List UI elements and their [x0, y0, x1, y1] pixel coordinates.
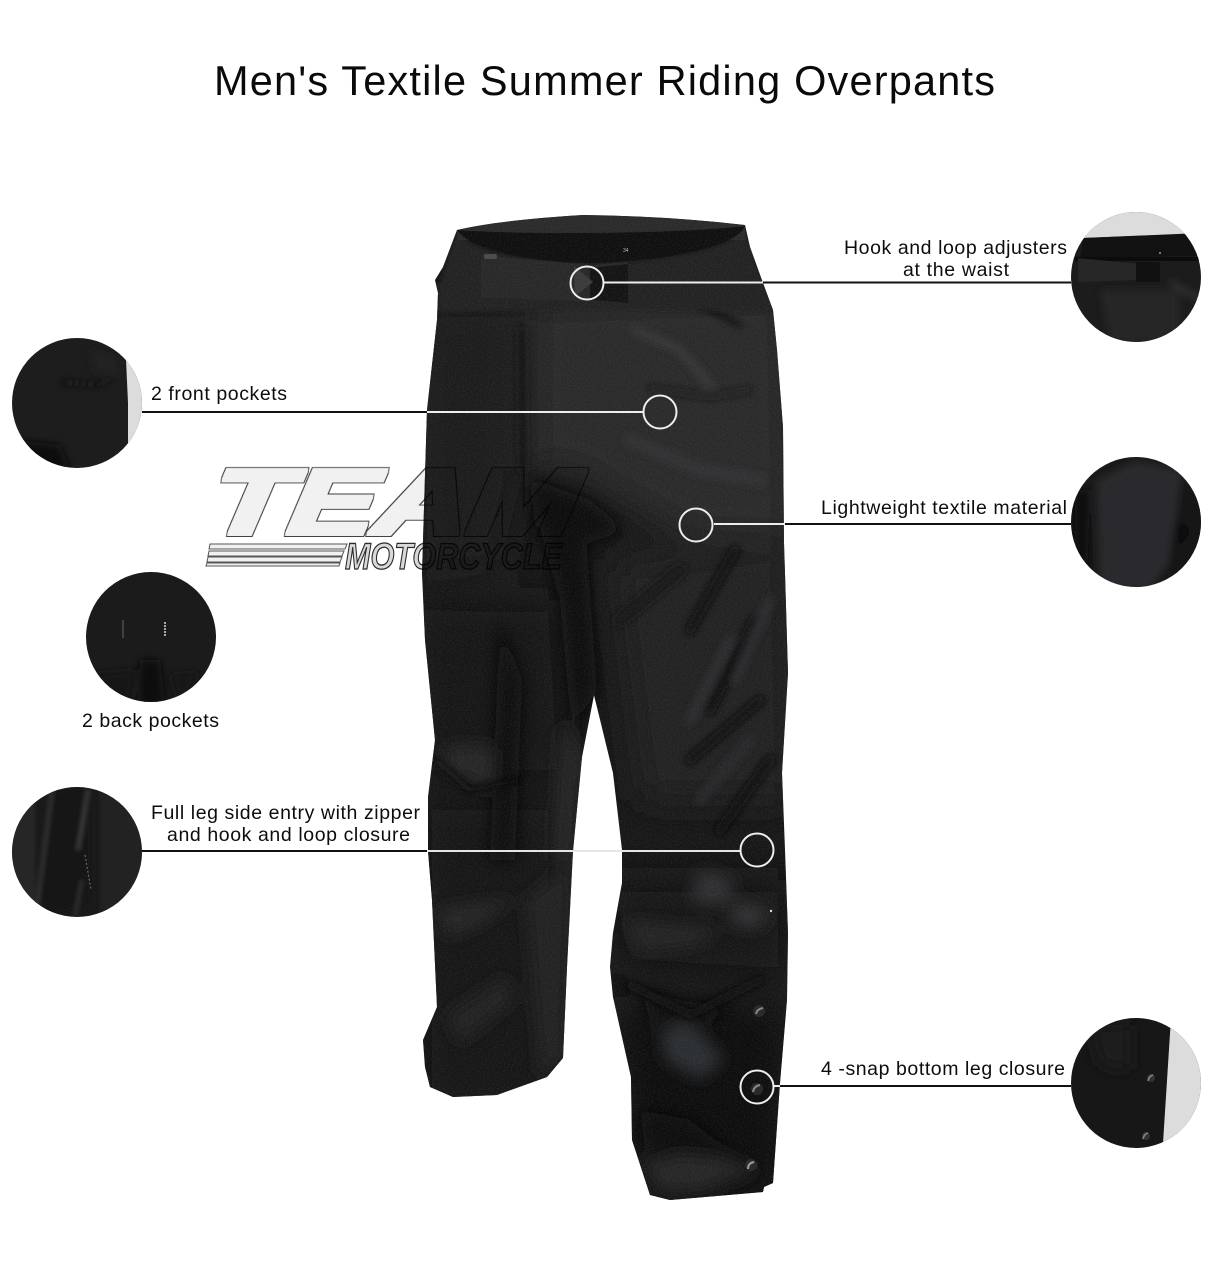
detail photo: front pocket [12, 338, 142, 470]
callout: hook and loop adjusters [570, 212, 1201, 342]
leader line [142, 850, 427, 852]
callout: 2 back pockets [82, 572, 219, 732]
size tag: 34 [623, 248, 629, 254]
watermark logo [204, 450, 589, 577]
marker ring [740, 1070, 774, 1104]
callout: 2 front pockets [12, 338, 676, 470]
front waistband [438, 228, 772, 312]
leader line [763, 282, 1071, 284]
strap buckle [484, 254, 497, 259]
label: 2 back pockets [82, 710, 219, 732]
hook patch [590, 264, 628, 303]
detail photo: snaps [1071, 1018, 1201, 1148]
title: Men's Textile Summer Riding Overpants [214, 57, 995, 104]
label: and hook and loop closure [167, 824, 410, 846]
label: Full leg side entry with zipper [151, 802, 420, 824]
marker ring [680, 508, 712, 542]
hook and loop strap [506, 258, 628, 266]
waistband back [457, 215, 745, 240]
logo wordmark MOTORCYCLE: MOTORCYCLE [345, 536, 563, 577]
marker ring [644, 396, 676, 428]
leader line [780, 1085, 1071, 1087]
label: 2 front pockets [151, 383, 287, 405]
pants product illustration [422, 215, 788, 1200]
detail photo: waist [1071, 212, 1201, 342]
detail photo: back pockets [86, 572, 216, 705]
detail photo: side zipper [12, 787, 142, 917]
waist opening [457, 226, 745, 263]
callout: 4-snap bottom leg closure [740, 1018, 1201, 1148]
logo wordmark TEAM: TEAM [204, 450, 589, 554]
leader line [142, 411, 427, 413]
marker ring [740, 834, 774, 866]
marker ring [570, 266, 604, 300]
leader line [785, 523, 1071, 525]
callout: full leg side entry [12, 787, 774, 917]
label: Lightweight textile material [821, 497, 1067, 519]
fabric grain [422, 215, 788, 1200]
label: Hook and loop adjusters [844, 237, 1067, 259]
logo speed stripes [206, 544, 347, 566]
label: 4 -snap bottom leg closure [821, 1058, 1065, 1080]
label: at the waist [903, 259, 1010, 281]
leg snaps [745, 910, 772, 1171]
detail photo: material [1071, 457, 1205, 590]
callout: lightweight textile material [680, 457, 1205, 590]
